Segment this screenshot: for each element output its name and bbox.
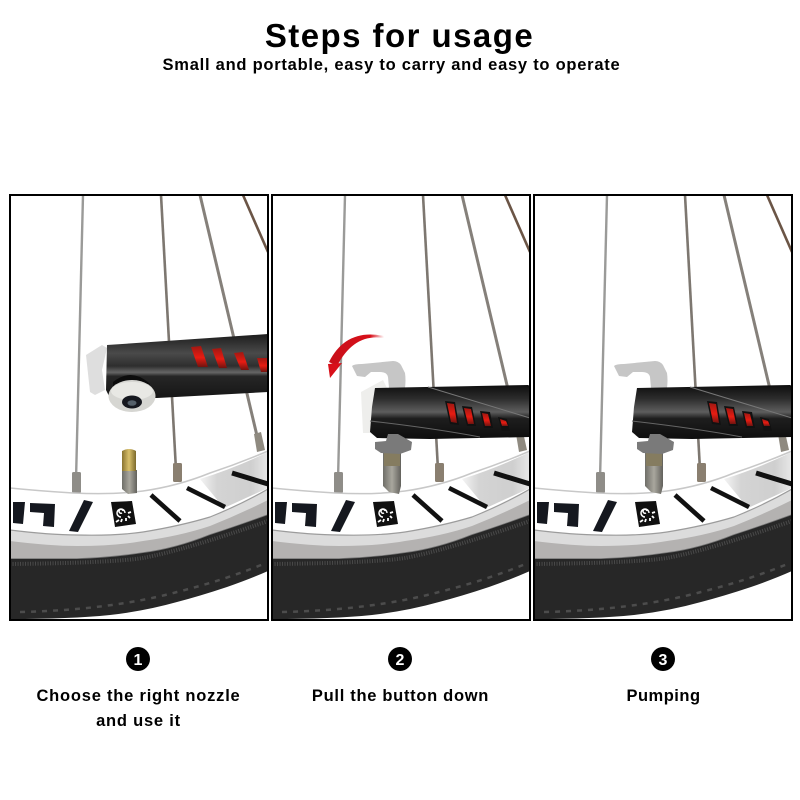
red rotation arrow (328, 334, 384, 378)
wheel with spokes, rim and tire (272, 195, 530, 619)
step 3 badge (651, 647, 675, 671)
step 3 badge: 3 (659, 652, 668, 669)
subtitle: Small and portable, easy to carry and easy to operate (163, 56, 620, 74)
panel border (534, 195, 792, 620)
step 2 badge (388, 647, 412, 671)
lever raised (614, 361, 668, 388)
step 1 label (36, 687, 241, 730)
step 1 label: and use it (96, 712, 181, 730)
white flap (361, 380, 387, 433)
panel border (272, 195, 530, 620)
panel: step 2 photo (272, 195, 530, 620)
pump head on valve (370, 385, 530, 494)
step 3 label: Pumping (626, 687, 701, 705)
pump head on valve (632, 385, 792, 494)
panel: step 3 photo (534, 195, 792, 620)
step 2 label: Pull the button down (312, 687, 489, 705)
valve stem (122, 449, 137, 494)
title: Steps for usage (265, 17, 534, 54)
pump head with nozzle (86, 334, 268, 412)
step 2 badge: 2 (396, 652, 405, 669)
step 1 badge (126, 647, 150, 671)
wheel with spokes, rim and tire (10, 195, 268, 619)
panel border (10, 195, 268, 620)
panel: step 1 photo (10, 195, 268, 620)
step 1 badge: 1 (134, 652, 143, 669)
wheel with spokes, rim and tire (534, 195, 792, 619)
lever raised (352, 361, 406, 388)
step 1 label: Choose the right nozzle (36, 687, 241, 705)
